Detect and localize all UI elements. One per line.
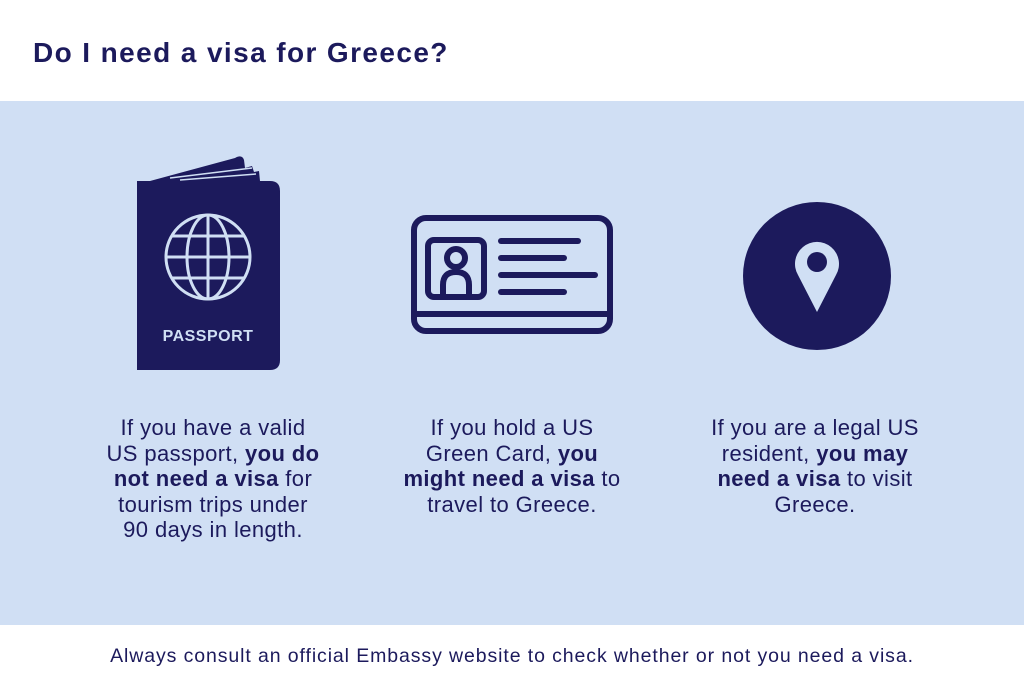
text: resident: resident, you may xyxy=(722,440,908,466)
text: passport: tourism trips under xyxy=(118,492,308,516)
text: resident: Greece. xyxy=(774,492,856,516)
text: green card: travel to Greece. xyxy=(427,492,597,516)
text: green card: Green Card, you xyxy=(426,440,598,466)
text: passport: If you have a valid xyxy=(121,415,305,440)
icon: passport: PASSPORT xyxy=(163,328,253,345)
text: resident: If you are a legal US xyxy=(711,415,919,440)
text: passport: 90 days in length. xyxy=(123,517,303,542)
text: green card xyxy=(403,415,621,516)
text: passport: US passport, you do xyxy=(106,440,320,466)
text: passport: not need a visa for xyxy=(114,466,312,491)
panel: main blue xyxy=(0,101,1024,625)
icon: location pin xyxy=(743,202,891,350)
title: Do I need a visa for Greece? xyxy=(33,37,449,68)
text: passport xyxy=(106,415,320,542)
text: resident xyxy=(711,415,919,516)
footer note: Always consult an official Embassy website to check whether or not you need a visa. xyxy=(110,645,914,667)
text: green card: might need a visa to xyxy=(403,466,621,491)
text: resident: need a visa to visit xyxy=(717,466,913,491)
icon: green card xyxy=(411,215,613,334)
text: green card: If you hold a US xyxy=(431,415,593,440)
icon: passport xyxy=(137,156,280,370)
